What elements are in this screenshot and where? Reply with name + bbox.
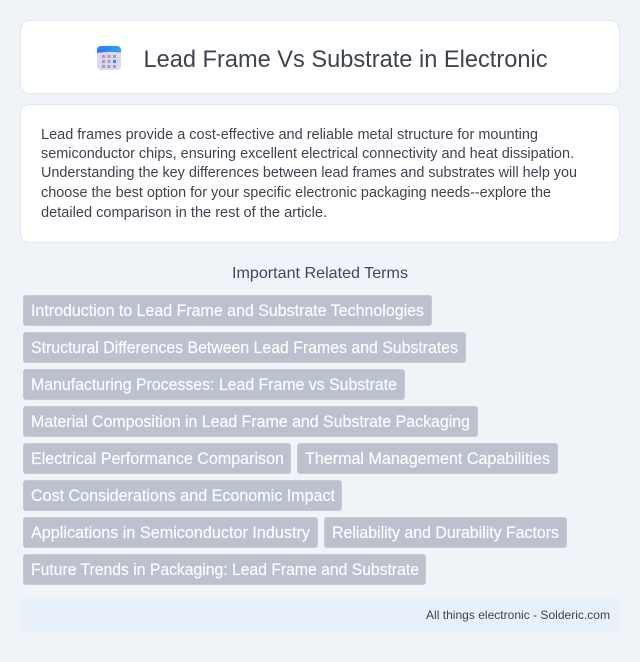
tag: future trends: Future Trends in Packaging: Lead Frame and Substrate [31,561,419,579]
tag: thermal management: Thermal Management Capabilities [305,450,550,468]
tag: material composition: Material Composition in Lead Frame and Substrate Packaging [31,413,470,431]
tag: introduction: Introduction to Lead Frame and Substrate Technologies [31,302,424,320]
description text: Lead frames provide a cost-effective and reliable metal structure for mounting [41,127,538,143]
description text: semiconductor chips, ensuring excellent electrical connectivity and heat dissipation. [41,146,574,162]
tag: electrical performance [24,444,290,474]
description text: choose the best option for your specific electronic packaging needs--explore the [41,185,551,201]
panel: description [20,104,620,242]
tag: manufacturing processes: Manufacturing Processes: Lead Frame vs Substrate [31,376,397,394]
heading: important related terms: Important Related Terms [232,265,408,282]
description text: Understanding the key differences between lead frames and substrates will help you [41,165,577,181]
icon: calendar grid [97,46,121,70]
description text: detailed comparison in the rest of the article. [41,205,327,221]
tag: material composition [24,406,478,436]
header panel [20,20,620,94]
description text [41,127,577,221]
tag: reliability: Reliability and Durability Factors [332,524,559,542]
tag: structural differences: Structural Differences Between Lead Frames and Substrates [31,339,458,357]
tag: thermal management [298,444,558,474]
tag: applications: Applications in Semiconductor Industry [31,524,311,542]
tag: reliability [324,518,566,548]
footer [20,598,620,632]
tag: structural differences [24,332,466,362]
tag: manufacturing processes [24,370,404,400]
title: Lead Frame Vs Substrate in Electronic [144,46,548,73]
tag: electrical performance: Electrical Performance Comparison [31,450,284,468]
tag: cost considerations [24,480,342,510]
tag: cost considerations: Cost Considerations and Economic Impact [31,487,335,505]
tag: introduction [24,296,432,326]
tag: future trends [24,554,426,584]
footer: All things electronic - Solderic.com [426,608,610,622]
tag: applications [24,518,318,548]
tag list [24,296,566,584]
